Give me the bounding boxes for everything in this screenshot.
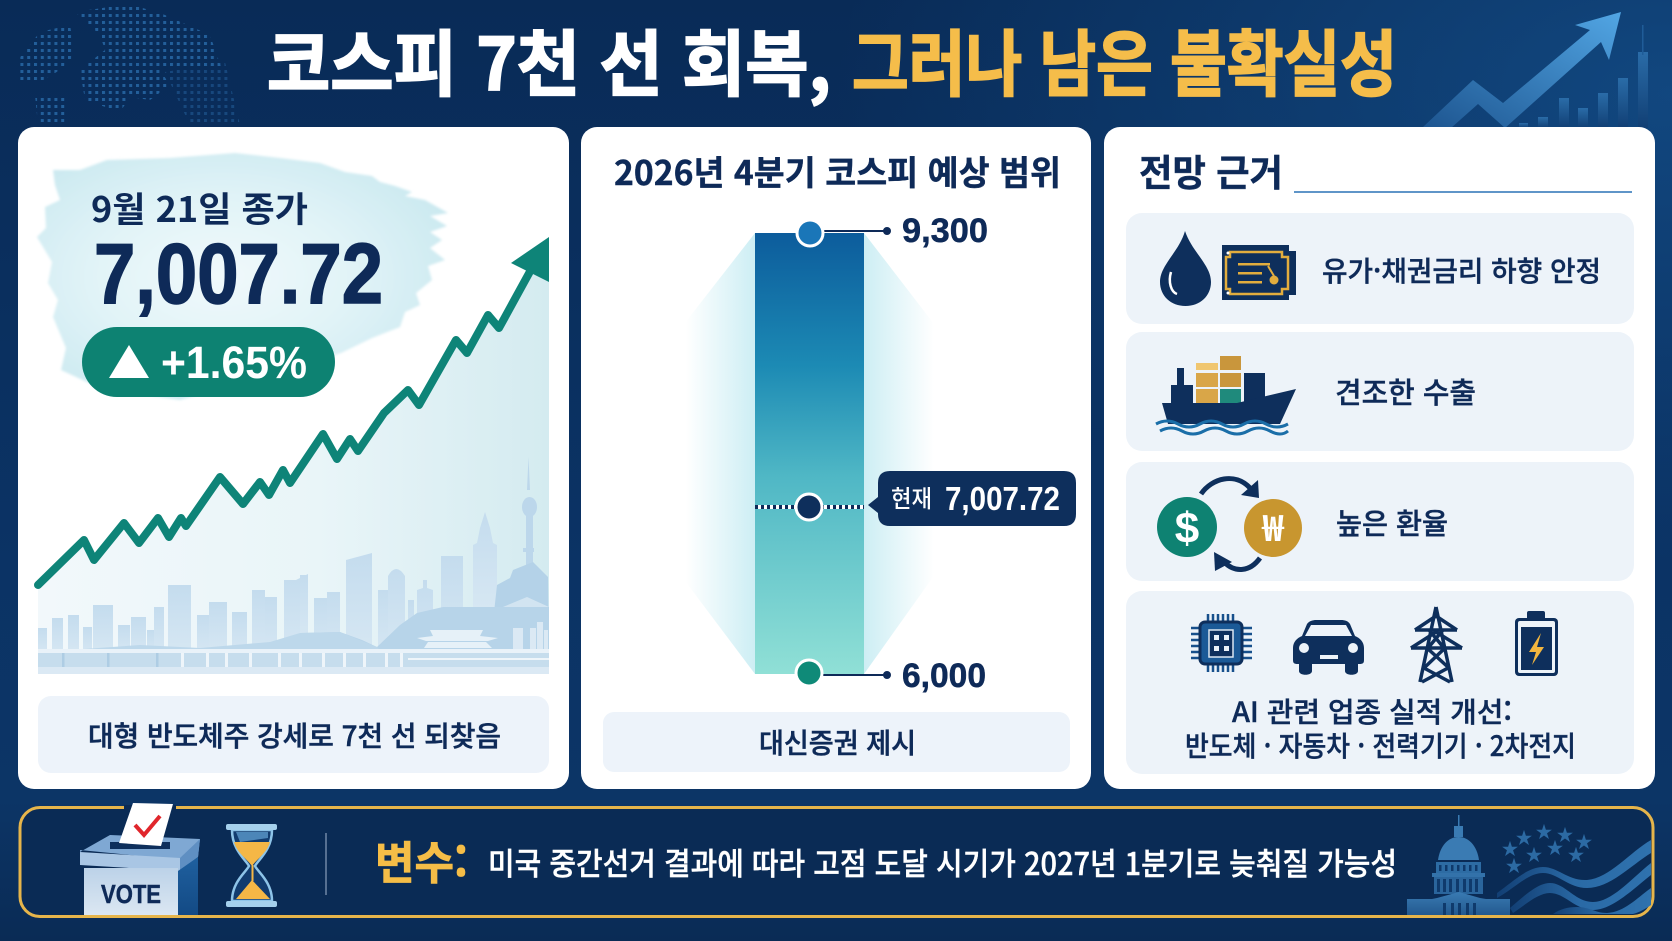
- brush highlight: [37, 153, 448, 400]
- row: exchange rate: [1126, 462, 1634, 581]
- flag and stars: ★: [1526, 846, 1542, 865]
- city skyline: [38, 457, 549, 674]
- closing value: 7,007.72: [94, 227, 383, 322]
- icon: capitol: [1407, 815, 1510, 915]
- current marker: [755, 471, 1076, 526]
- caption: [38, 696, 549, 773]
- panel: outlook rationale: [1104, 127, 1655, 789]
- icon: currency exchange: [1157, 479, 1302, 571]
- flag and stars: ★: [1556, 826, 1574, 845]
- sector text: 반도체 · 자동차 · 전력기기 · 2차전지: [1185, 725, 1576, 765]
- title: 그러나 남은 불확실성: [852, 6, 1397, 111]
- icon: semiconductor chip: [1191, 614, 1252, 672]
- title: [267, 6, 1397, 111]
- range bar: [755, 233, 864, 674]
- flag and stars: ★: [1502, 840, 1518, 859]
- row: exchange rate: 높은 환율: [1336, 501, 1448, 543]
- heading: 2026년 4분기 코스피 예상 범위: [614, 146, 1061, 195]
- icon: ballot box: [80, 803, 200, 915]
- sector text: [1185, 691, 1576, 765]
- row: exports: 견조한 수출: [1335, 370, 1476, 412]
- panel: forecast range: [581, 127, 1091, 789]
- caption: 대형 반도체주 강세로 7천 선 되찾음: [88, 715, 501, 755]
- Namsan mountain and tower: [522, 457, 537, 565]
- icon: currency exchange: $: [1175, 504, 1199, 553]
- change pill: [82, 327, 335, 397]
- icon: bond certificate: [1222, 245, 1296, 300]
- icon: battery: [1515, 611, 1558, 676]
- heading: 전망 근거: [1139, 143, 1283, 197]
- caption: [603, 712, 1070, 772]
- divider: [325, 833, 327, 895]
- variable text: 미국 중간선거 결과에 따라 고점 도달 시기가 2027년 1분기로 늦춰질 가능성: [488, 839, 1397, 884]
- flag and stars: ★: [1506, 857, 1522, 876]
- rising teal line with arrow: [38, 237, 549, 585]
- variable banner: [20, 803, 1653, 916]
- row: exports: [1126, 332, 1634, 451]
- chart area fill: [38, 237, 549, 674]
- low marker 6,000: [796, 657, 986, 695]
- sector text: AI 관련 업종 실적 개선:: [1232, 691, 1512, 731]
- palace: [417, 630, 498, 648]
- date label: 9월 21일 종가: [91, 182, 308, 233]
- caption: 대신증권 제시: [759, 722, 916, 762]
- row: AI-related sectors: [1126, 591, 1634, 774]
- icon: container ship: [1156, 356, 1296, 434]
- row: oil and bond yields: [1126, 213, 1634, 324]
- flag and stars: ★: [1536, 823, 1552, 842]
- flag and stars: ★: [1546, 839, 1564, 858]
- icon: ballot box: VOTE: [101, 879, 161, 909]
- title: 코스피 7천 선 회복,: [267, 6, 831, 111]
- flag and stars: ★: [1568, 846, 1584, 865]
- icon: oil drop: [1160, 231, 1211, 306]
- icon: currency exchange: ₩: [1261, 500, 1284, 552]
- current marker: 현재: [891, 479, 932, 514]
- low marker 6,000: 6,000: [902, 657, 986, 695]
- flag and stars: [1497, 823, 1651, 914]
- high marker 9,300: 9,300: [902, 212, 988, 250]
- icon: hourglass: [226, 824, 277, 907]
- current marker: 7,007.72: [945, 480, 1060, 517]
- high marker 9,300: [797, 212, 988, 250]
- decorative rising arrow and bars: [1423, 12, 1648, 128]
- icon: transmission tower: [1411, 607, 1462, 682]
- glow behind bar: [656, 233, 964, 674]
- decorative dotted globe: [18, 4, 240, 125]
- flag and stars: ★: [1576, 833, 1592, 852]
- panel: closing price: [18, 127, 569, 789]
- row: oil and bond yields: 유가·채권금리 하향 안정: [1322, 250, 1601, 290]
- variable label: 변수:: [375, 827, 468, 892]
- change pill: +1.65%: [161, 337, 307, 388]
- icon: car: [1293, 620, 1364, 675]
- flag and stars: ★: [1516, 829, 1532, 848]
